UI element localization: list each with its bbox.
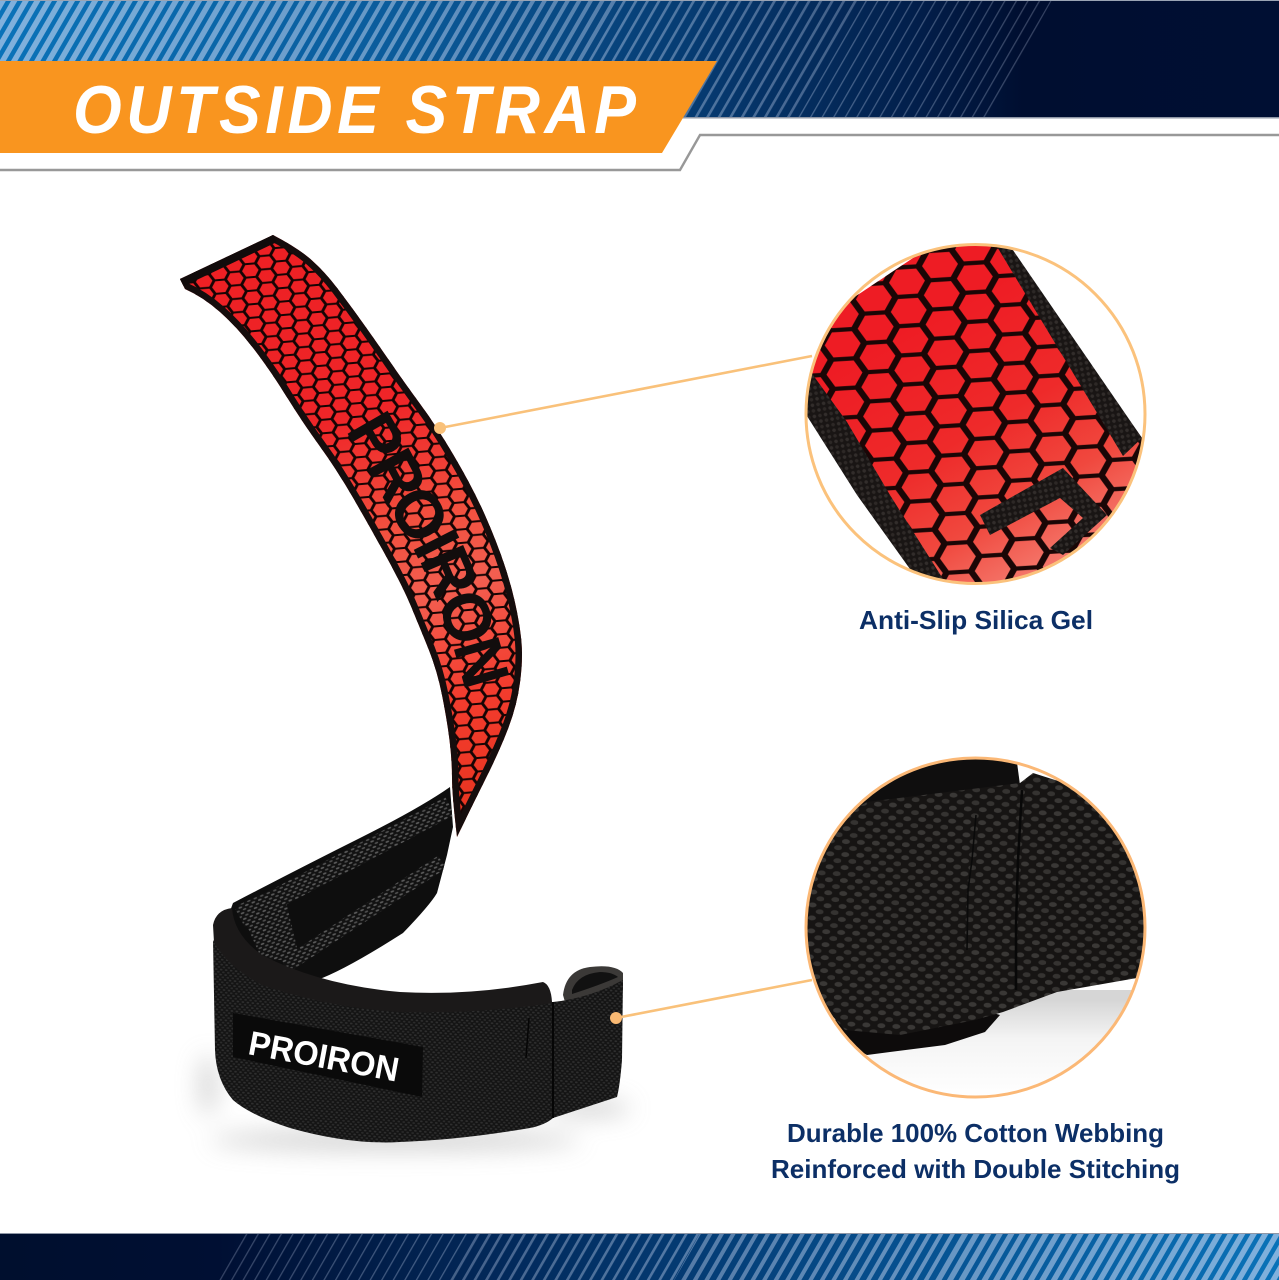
woven logo label [233, 1013, 423, 1097]
floor shadow [834, 990, 1132, 1054]
cuff loop flap [526, 966, 623, 1118]
detail circle: cotton webbing [800, 755, 1150, 1100]
caption: cotton webbing: Durable 100% Cotton Webbing [787, 1118, 1164, 1148]
wrist cuff padding rim [213, 908, 552, 1025]
callout connector: webbing [610, 980, 812, 1024]
detail circle: anti-slip silica gel [790, 240, 1150, 600]
label wordmark: PROIRON [246, 1025, 402, 1090]
callout connector: silica gel [434, 356, 812, 434]
title text: OUTSIDE STRAP [73, 72, 636, 148]
bottom footer band [0, 1233, 1279, 1280]
stitched edges [993, 240, 1142, 456]
double stitching seams [1016, 790, 1022, 990]
gel surface [812, 246, 1142, 582]
top header band [0, 0, 1279, 118]
embroidered letter fragment [980, 468, 1107, 555]
neoprene pad [859, 760, 1020, 806]
wrist cuff body [213, 940, 553, 1142]
title banner [0, 61, 717, 153]
strap underside webbing [225, 787, 453, 980]
red silica gel strap [180, 235, 522, 837]
strap logo lettering: PROIRON [348, 410, 509, 688]
product: lifting strap [180, 235, 670, 1161]
caption: silica gel: Anti-Slip Silica Gel [859, 605, 1093, 635]
cuff floor shadow [200, 1055, 630, 1150]
webbing fabric [800, 773, 1150, 1035]
caption: cotton webbing [771, 1118, 1180, 1184]
header outline rule [0, 135, 1279, 170]
caption: cotton webbing: Reinforced with Double Stitching [771, 1154, 1180, 1184]
